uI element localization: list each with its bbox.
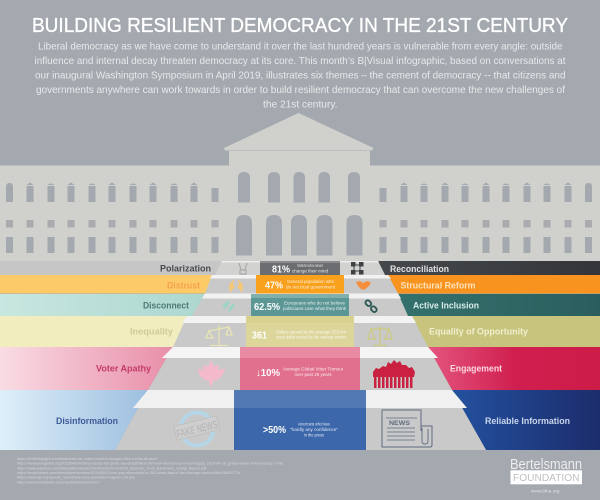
stat: polarization: change their mind (292, 268, 329, 274)
stat: disinformation: Americans who have (298, 422, 331, 426)
icon: handshake (356, 281, 371, 290)
lower windows (6, 237, 592, 253)
icon: fake news stamp (174, 412, 220, 446)
icon: unbalanced scale (206, 325, 232, 346)
icon: fake news stamp: FAKE NEWS (175, 419, 219, 441)
left labels: Disconnect (143, 300, 190, 312)
icon: raised hands (373, 360, 415, 388)
stat: inequality (252, 330, 347, 342)
icon: newspaper: NEWS (389, 420, 411, 427)
stat: inequality: every dollar earned by the average worker (276, 334, 347, 340)
stat: disconnect: Europeans who do not believe (284, 300, 346, 306)
stat: disinformation: "hardly any confidence" (290, 427, 339, 432)
step 3 (192, 294, 408, 316)
right labels: Engagement (450, 364, 503, 374)
right bands: solutions (378, 261, 600, 450)
stat: polarization: 81% (272, 264, 290, 276)
stat: voter apathy: over past 25 years (294, 372, 332, 377)
stat: inequality: 361 (252, 330, 267, 342)
stat: voter apathy: Average Global Voter Turnout (283, 366, 344, 372)
stat: distrust: 47% (265, 280, 283, 292)
icon: balanced scale (368, 326, 392, 346)
stat: disinformation: >50% (263, 425, 286, 436)
stat: distrust (265, 279, 336, 292)
left labels (56, 264, 211, 427)
intro paragraph: Liberal democracy as we have come to understand it over the last hundred years is vulnerable from every angle: outside (38, 42, 563, 52)
intro paragraph: our inaugural Washington Symposium in April 2019, illustrates six themes – the cement of democracy -- that citizens and (35, 70, 566, 82)
sources: https://www.forbes.com/sites/dianehembree/2018/05/22/ceo-pay-skyrockets-to-361-times-that-of-the-average-worker/#5e97582f777a (17, 471, 240, 475)
step 6 (115, 390, 486, 450)
logo: Bertelsmann Foundation: Bertelsmann (510, 457, 582, 473)
stat: distrust: General population who (287, 279, 335, 284)
right labels: Active Inclusion (413, 300, 479, 312)
sources: https://www.api.org/special_report/how-does-journalism-happen-pdf.php (17, 476, 135, 480)
left labels: Distrust (167, 280, 201, 292)
stat: disconnect: politicians care what they think (283, 306, 347, 311)
right labels: Reliable Information (485, 416, 570, 427)
centre column (234, 261, 366, 450)
icon: chain link (365, 299, 378, 313)
stat: polarization: Voters who never (297, 263, 323, 268)
step 2 (205, 275, 398, 294)
intro paragraph: governments anywhere can work towards in order to build resilient democracy that can overcome the new challenges of (36, 85, 565, 96)
left bands: problems (0, 261, 225, 450)
stat: voter apathy: ↓10% (256, 368, 280, 379)
icon: newspaper (382, 410, 432, 447)
upper windows (6, 182, 592, 202)
small square windows (6, 220, 592, 228)
building (0, 113, 600, 262)
logo: Bertelsmann Foundation (510, 457, 582, 484)
sources: https://www.edelman.com/sites/g/files/aatuss191/files/2019-02/2019_Edelman_Trust_Barometer_Global_Report.pdf (17, 466, 206, 470)
stat: disinformation: in the press (304, 432, 324, 438)
step 5 (148, 347, 452, 390)
right labels (390, 264, 570, 427)
title: BUILDING RESILIENT DEMOCRACY IN THE 21ST CENTURY (32, 15, 568, 37)
left labels: Polarization (160, 264, 211, 274)
central upper arches (238, 172, 360, 202)
intro paragraph (34, 42, 566, 110)
icon: raised fingers (239, 263, 247, 274)
icon: broken handshake (229, 279, 243, 293)
logo: Bertelsmann Foundation: FOUNDATION (513, 472, 580, 484)
stat: distrust: do not trust government (286, 284, 336, 290)
sources: https://www.worldbank.org/en/publication/wdr2017 (17, 480, 100, 484)
right labels: Structural Reform (400, 280, 476, 292)
left labels: Inequality (130, 326, 174, 338)
stat: disconnect (254, 300, 347, 313)
icon: broken link (222, 300, 235, 312)
staircase (115, 261, 486, 450)
website: www.bfna.org (531, 488, 560, 494)
stat: polarization (272, 263, 329, 276)
sources: https://www.pewglobal.org/2019/04/29/many-across-the-globe-are-dissatisfied-with-how-democracy-is-working/pg_2019-04-29_global-views-of-democracy_0-06/ (17, 462, 283, 466)
left labels: Voter Apathy (96, 364, 152, 374)
intro paragraph: the 21st century. (263, 100, 338, 110)
icon: network squares (351, 262, 364, 274)
left labels: Disinformation (56, 416, 118, 427)
pediment (224, 113, 374, 150)
stat: inequality: Dollars earned by the average CEO for (276, 330, 347, 334)
step 4 (173, 316, 428, 347)
right labels: Equality of Opportunity (429, 326, 529, 338)
step 1 (215, 261, 385, 275)
stat: voter apathy (256, 366, 344, 379)
sources: https://fivethirtyeight.com/features/most-voters-havent-changed-their-minds-all-year/ (17, 457, 157, 461)
sources (17, 457, 283, 484)
right labels: Reconciliation (390, 264, 449, 275)
stat: disconnect: 62.5% (254, 302, 280, 313)
central lower arches (236, 215, 362, 256)
stat: disinformation (263, 422, 339, 438)
icon: broken hand (197, 360, 226, 386)
intro paragraph: influence and internal decay threaten democracy at its core. This month’s B|Visual infographic, based on conversations at (34, 56, 566, 67)
